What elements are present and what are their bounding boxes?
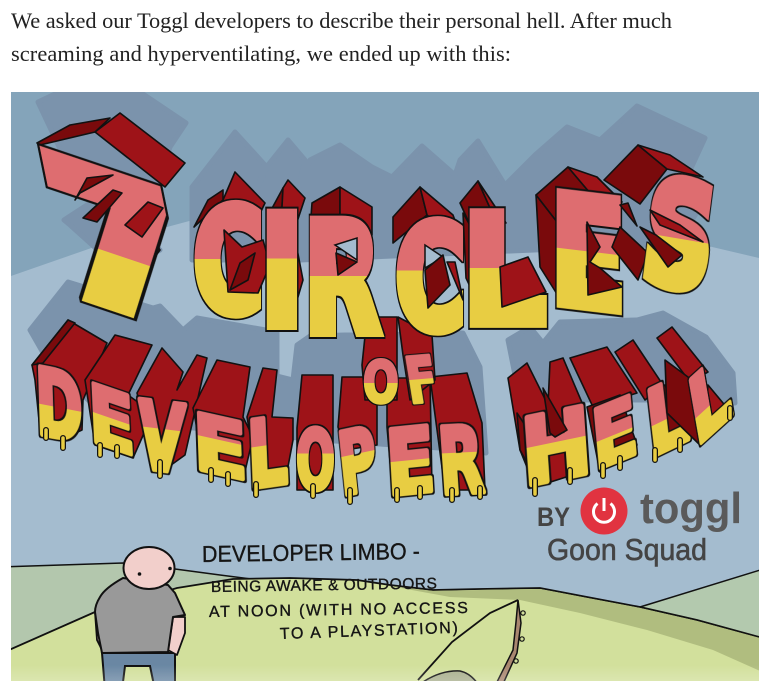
letter E [569,346,638,473]
title line 1: 7 CIRCLES [36,112,714,339]
grey shirt [95,578,185,653]
leaf plant with stem [418,600,525,681]
letter O: O [296,414,335,509]
by label: BY [537,502,570,532]
letter E: E [588,378,641,489]
title word: OF [361,316,436,406]
bottom fade [0,665,768,681]
letter H [507,357,590,490]
goon squad: Goon Squad [547,532,707,567]
back hill right [640,570,759,636]
jeans [102,653,175,681]
intro text: screaming and hyperventilating, we ended up with this: [11,41,511,66]
hill shade band [390,586,760,671]
digit 7: 7 [28,115,206,377]
sky background [11,92,759,606]
front hill [0,578,768,681]
letter E [85,335,153,475]
digit 7 [36,112,186,322]
letter E [535,166,624,318]
stem curls [514,611,525,663]
letter E: E [383,408,438,517]
caption: developer limbo: BEING AWAKE & OUTDOORS [211,575,437,596]
letter E: E [551,164,625,345]
letter E [192,359,251,484]
letter R: R [305,191,380,367]
left arm [95,612,102,650]
rock [420,671,478,681]
caption: developer limbo: AT NOON (WITH NO ACCESS [209,600,468,621]
caption: developer limbo [202,538,468,643]
letter L [656,326,735,448]
letter I [265,179,306,332]
letter R: R [435,408,487,517]
intro text: We asked our Toggl developers to describe their personal hell. After much [11,8,672,33]
letter D [31,319,108,442]
figure: developer character [95,547,185,681]
letter V [136,347,208,476]
intro text [11,8,672,66]
letter H: H [518,386,595,508]
letter L: L [246,397,289,510]
back hill left [11,562,249,648]
stem [496,600,521,681]
letter E: E [191,396,249,499]
title line 2: HELL [508,327,737,508]
letter D: D [34,349,84,465]
toggl wordmark: toggl [640,484,742,533]
head [124,547,174,589]
letter L [246,367,294,492]
letter L: L [682,334,737,468]
letter C: C [396,195,465,362]
right arm [168,617,185,655]
yellow drips under lower title [46,408,730,502]
letter I: I [261,186,303,360]
letter R [430,372,488,498]
letter V: V [136,381,187,495]
letter F: F [400,342,442,418]
caption: developer limbo: TO A PLAYSTATION) [280,620,458,643]
letter P: P [334,408,381,515]
letter L [614,339,692,458]
letter L: L [463,184,545,357]
letter C: C [194,181,263,345]
letter P [337,376,378,499]
caption: developer limbo: DEVELOPER LIMBO - [202,538,420,567]
letter E: E [87,366,137,475]
letter S [603,144,714,295]
eyes [138,567,172,576]
toggl byline [537,484,742,567]
letter O: O [363,348,399,416]
letter L: L [642,357,693,478]
letter E [386,377,435,499]
letter S: S [635,150,724,324]
hills [0,563,768,681]
title drop shadows [30,94,735,453]
title line 2: DEVELOPER [32,320,487,517]
icon: toggl power button [580,488,628,534]
leaf outline [418,600,518,680]
